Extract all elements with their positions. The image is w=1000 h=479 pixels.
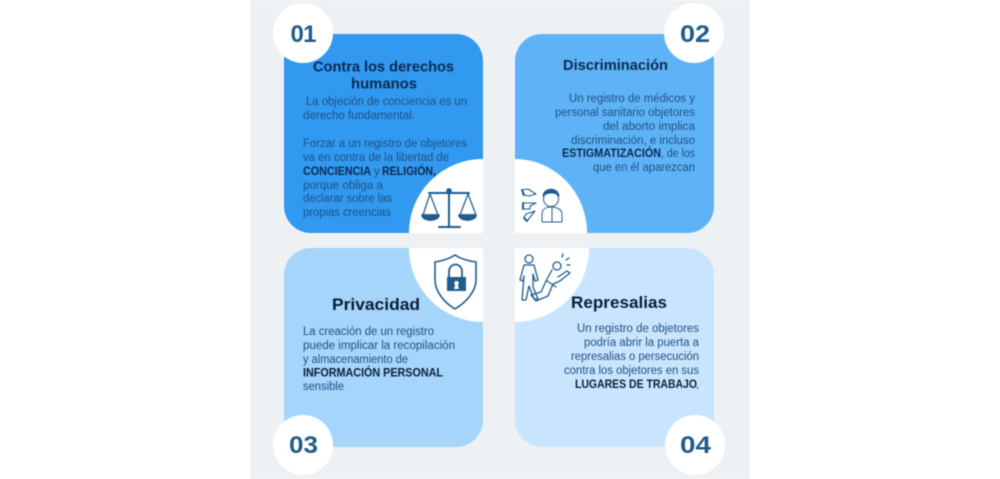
panel: 01 Contra los derechos humanos	[284, 34, 483, 233]
body text 04	[564, 323, 700, 391]
body text 01: y	[374, 166, 380, 178]
number badge 01: 01	[290, 21, 316, 48]
body text 02: que en él aparezcan	[593, 162, 695, 174]
body text 01: derecho fundamental.	[303, 110, 415, 122]
body text 01: va en contra de la libertad de	[303, 152, 449, 164]
number badge 03: 03	[289, 432, 318, 459]
body text 02: personal sanitario objetores	[555, 107, 695, 119]
body text 03: puede implicar la recopilación	[303, 340, 455, 352]
body text 04: ,	[696, 379, 699, 391]
panel: 02 Discriminación	[515, 34, 714, 233]
body text 01: La objeción de conciencia es un	[306, 96, 467, 108]
body text 01: porque obliga a	[303, 180, 384, 192]
number badge 04	[665, 415, 725, 475]
body text 02: ESTIGMATIZACIÓN	[562, 147, 661, 160]
heading 01	[313, 60, 454, 92]
body text 01: Forzar a un registro de objetores	[303, 138, 467, 150]
body text 02	[555, 93, 696, 174]
number badge 04: 04	[680, 432, 712, 459]
icon: person pushing another down	[520, 254, 570, 301]
body text 01: CONCIENCIA	[303, 166, 371, 178]
body text 04: Un registro de objetores	[577, 323, 699, 335]
center white quarter circles	[409, 159, 589, 322]
body text 01	[303, 96, 467, 219]
body text 03: INFORMACIÓN PERSONAL	[303, 366, 443, 380]
body text 04: contra los objetores en sus	[564, 365, 699, 377]
body text 04: podría abrir la puerta a	[584, 337, 700, 349]
body text 02: Un registro de médicos y	[569, 93, 695, 105]
panel: 04 Represalias	[515, 248, 714, 447]
body text 03: La creación de un registro	[303, 326, 434, 338]
icon: balance scale	[422, 189, 476, 227]
number badge 03	[273, 415, 333, 475]
card background 04	[515, 248, 714, 447]
number badge 02	[664, 3, 724, 63]
card background 01	[284, 34, 483, 233]
icon: person being pointed at	[522, 189, 562, 222]
body text 03: sensible	[303, 381, 344, 393]
heading 03: Privacidad	[332, 296, 420, 314]
panel: 03 Privacidad	[284, 248, 483, 447]
body text 03	[303, 326, 455, 393]
heading 01: humanos	[351, 76, 417, 92]
heading 01: Contra los derechos	[313, 60, 454, 76]
number badge 02: 02	[680, 21, 710, 48]
body text 02: discriminación, e incluso	[571, 135, 695, 147]
body text 02: del aborto implica	[603, 121, 696, 133]
card background 02	[515, 34, 714, 233]
body text 01: propias creencias	[303, 207, 391, 219]
heading 02: Discriminación	[563, 58, 668, 74]
icon: shield with padlock	[435, 255, 476, 309]
heading 04: Represalias	[571, 294, 667, 312]
background panel	[250, 0, 750, 479]
body text 02: , de los	[661, 148, 695, 160]
body text 01: RELIGIÓN,	[382, 165, 436, 178]
body text 01: declarar sobre las	[303, 193, 392, 205]
body text 04: LUGARES DE TRABAJO	[575, 379, 697, 391]
card background 03	[284, 248, 483, 447]
body text 04: represalias o persecución	[571, 351, 699, 363]
number badge 01	[273, 3, 333, 63]
body text 03: y almacenamiento de	[303, 354, 408, 366]
